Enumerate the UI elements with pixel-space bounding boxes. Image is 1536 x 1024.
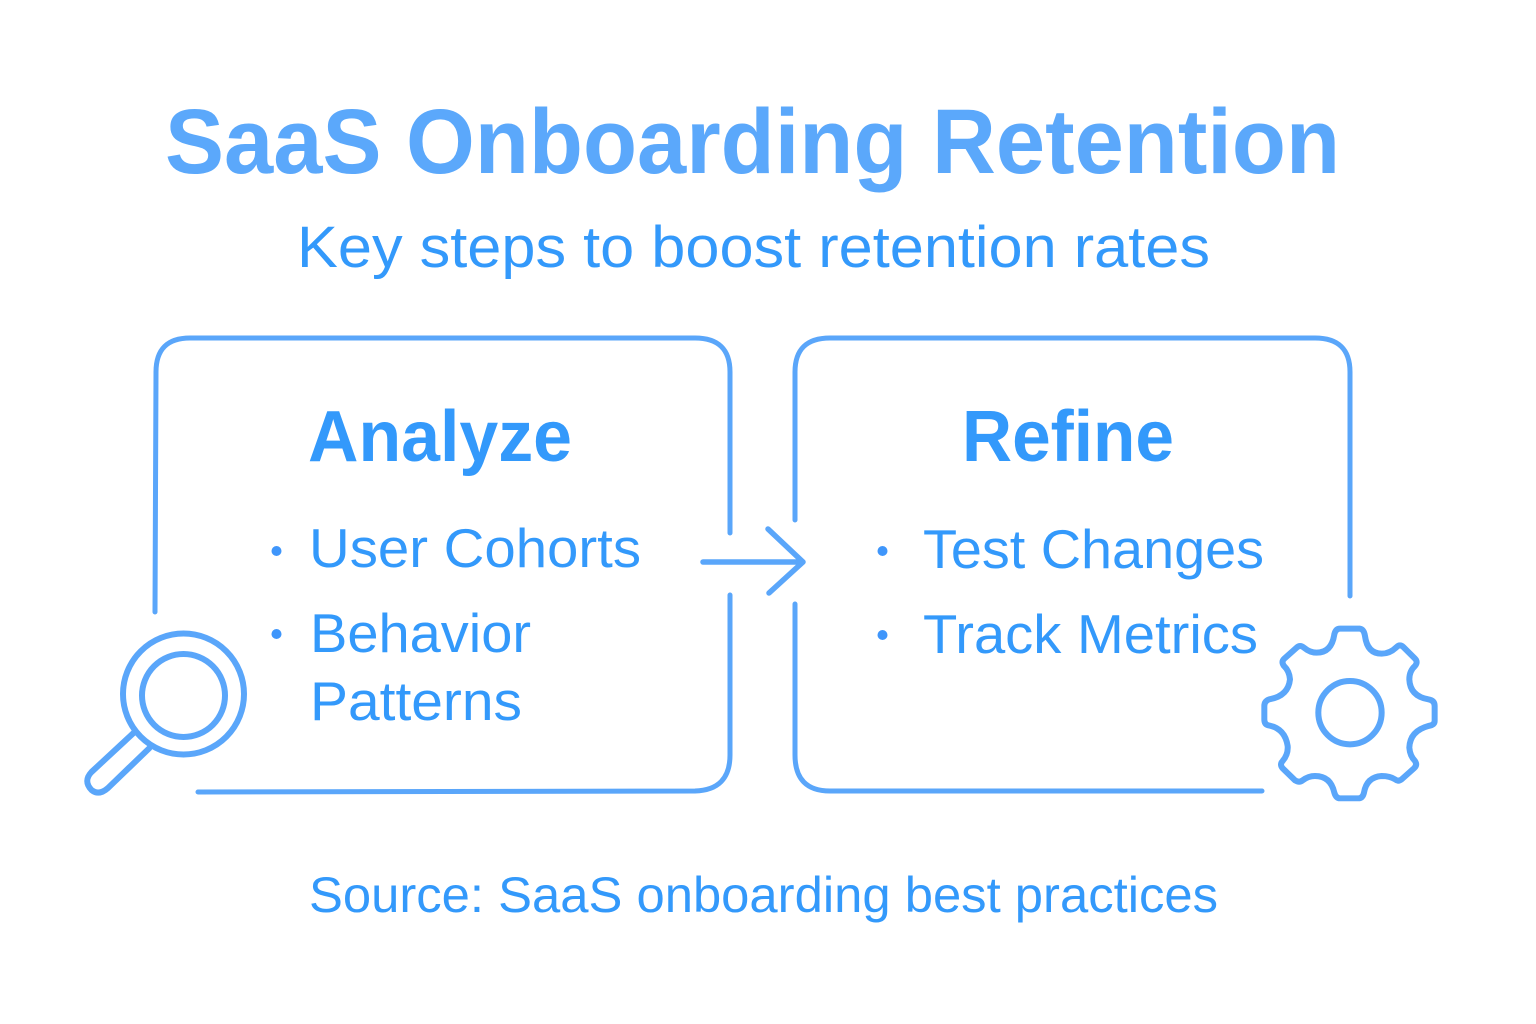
subtitle: Key steps to boost retention rates <box>297 215 1210 280</box>
panel border: analyze <box>155 338 730 792</box>
bullet: behavior patterns <box>272 602 531 732</box>
bullet: test changes: Test Changes <box>923 518 1264 580</box>
arrow: analyze to refine <box>703 529 803 593</box>
panel: refine <box>795 338 1350 791</box>
heading: refine: Refine <box>962 397 1174 477</box>
icon: gear <box>1264 629 1435 798</box>
bullet: user cohorts: User Cohorts <box>309 517 641 579</box>
panel border: refine <box>795 338 1350 791</box>
source note: Source: SaaS onboarding best practices <box>309 867 1218 923</box>
bullet: behavior patterns: Behavior <box>310 602 531 664</box>
panel: analyze <box>155 338 730 792</box>
heading: analyze: Analyze <box>308 397 572 477</box>
bullet: behavior patterns: Patterns <box>310 670 522 732</box>
title: SaaS Onboarding Retention <box>165 91 1340 193</box>
icon: magnifying glass <box>87 634 244 793</box>
bullet: track metrics: Track Metrics <box>923 603 1258 665</box>
